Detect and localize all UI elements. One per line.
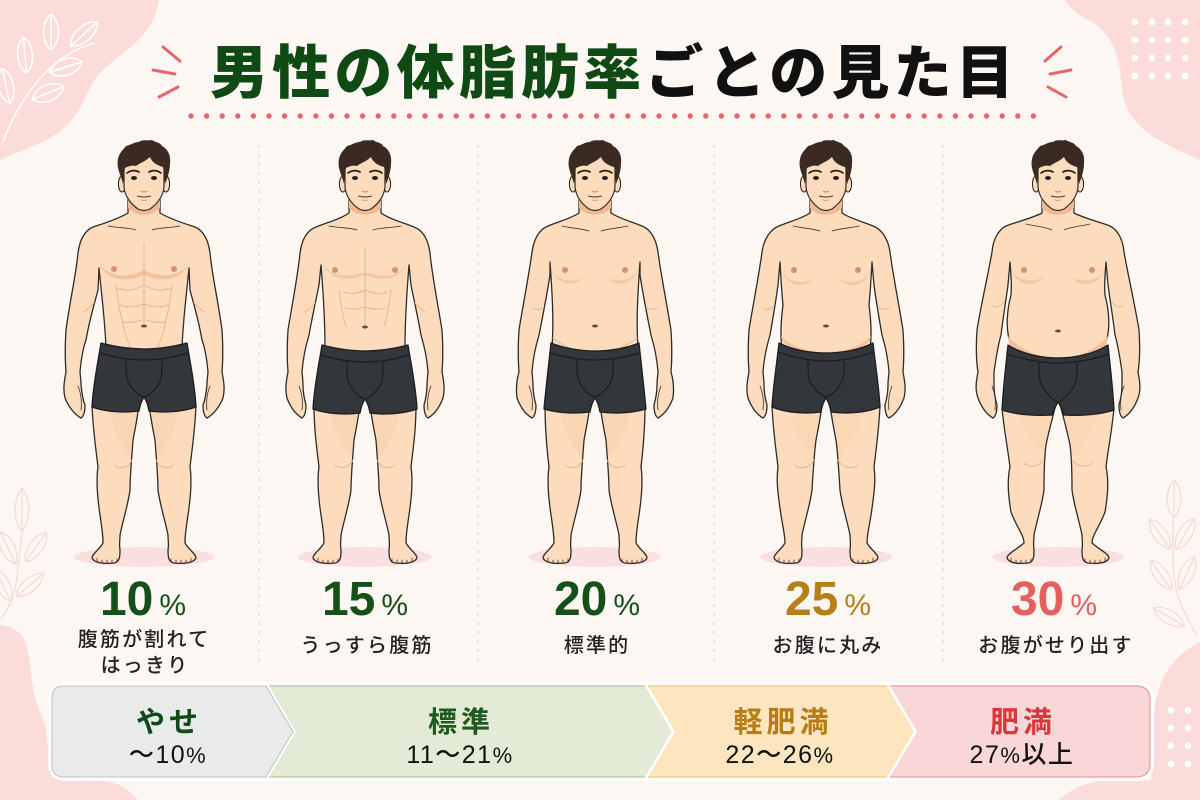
segment: 肥満: 肥満 (990, 706, 1056, 739)
boxer shorts (313, 345, 417, 414)
leaf sprig: top left (0, 14, 102, 142)
torso centre (129, 205, 159, 365)
label: 15%: 15% (322, 573, 408, 626)
leaf sprig: bottom left (0, 488, 52, 620)
floor shadow (529, 547, 661, 567)
figure: 15% body (286, 140, 444, 567)
floor shadow (992, 547, 1124, 567)
body half (64, 200, 144, 563)
boxer shorts (1002, 345, 1114, 415)
label: 30% (978, 573, 1134, 657)
torso centre (811, 205, 841, 365)
body half (516, 200, 595, 563)
floor shadow (760, 547, 892, 567)
belly shading (1008, 224, 1108, 360)
body half (286, 200, 365, 563)
figure: 25% body (747, 140, 905, 567)
muscle definition (100, 226, 188, 347)
figure: 20% body (516, 140, 674, 567)
head (1032, 140, 1084, 215)
boxer shorts (544, 343, 646, 413)
label: 25%: 25% (785, 573, 871, 626)
segment: 肥満: 27%以上 (970, 741, 1074, 769)
head (118, 140, 170, 215)
label: 20%: 20% (554, 573, 640, 626)
body shading (781, 226, 871, 354)
label: 15%: うっすら腹筋 (300, 634, 434, 657)
dot grid: bottom right (1168, 707, 1191, 767)
classification bar (48, 682, 1154, 781)
segment: 標準 (269, 686, 672, 777)
label: 20% (554, 573, 640, 657)
torso centre (350, 205, 380, 365)
title: 男性の体脂肪率ごとの見た目 (210, 41, 1018, 106)
label: 20%: 標準的 (564, 634, 630, 657)
body shading (552, 226, 638, 349)
segment: やせ (52, 686, 293, 777)
torso centre (580, 205, 610, 365)
figure: 10% body (64, 140, 224, 567)
boxer shorts (772, 343, 880, 413)
body half (976, 200, 1058, 563)
label: 30%: 30% (1011, 573, 1097, 626)
head (339, 140, 391, 215)
figure: 30% body (976, 140, 1140, 567)
dot grid: top right (1132, 19, 1188, 79)
segment: やせ: 〜10% (129, 741, 207, 769)
label: 25% (772, 573, 884, 657)
label: 10% (78, 573, 210, 677)
segment: やせ: やせ (136, 706, 202, 739)
torso centre (1043, 205, 1073, 368)
blob: bottom right (1059, 642, 1200, 800)
label: 10%: はっきり (101, 655, 189, 677)
body half (747, 200, 826, 563)
accent: left title sparks (153, 47, 180, 97)
segment: 軽肥満 (648, 686, 914, 777)
muscle definition (323, 226, 407, 328)
label: 30%: お腹がせり出す (978, 634, 1134, 657)
accent: right title sparks (1045, 47, 1071, 97)
leaf sprig: bottom right (1144, 480, 1200, 637)
label: 10%: 10% (100, 573, 186, 626)
boxer shorts (92, 343, 196, 412)
head (800, 140, 852, 215)
head (569, 140, 621, 215)
blob: bottom left (0, 625, 138, 800)
segment: 肥満 (890, 686, 1150, 777)
segment: 標準: 11〜21% (406, 741, 514, 769)
floor shadow (74, 547, 214, 567)
label: 10%: 腹筋が割れて (78, 628, 210, 651)
label: 25%: お腹に丸み (772, 634, 884, 657)
blob: top right (1065, 0, 1200, 160)
segment: 標準: 標準 (428, 706, 494, 739)
segment: 軽肥満: 22〜26% (725, 741, 835, 769)
segment: 軽肥満: 軽肥満 (733, 706, 833, 739)
label: 15% (300, 573, 434, 657)
floor shadow (298, 547, 432, 567)
blob: top left (0, 0, 159, 160)
